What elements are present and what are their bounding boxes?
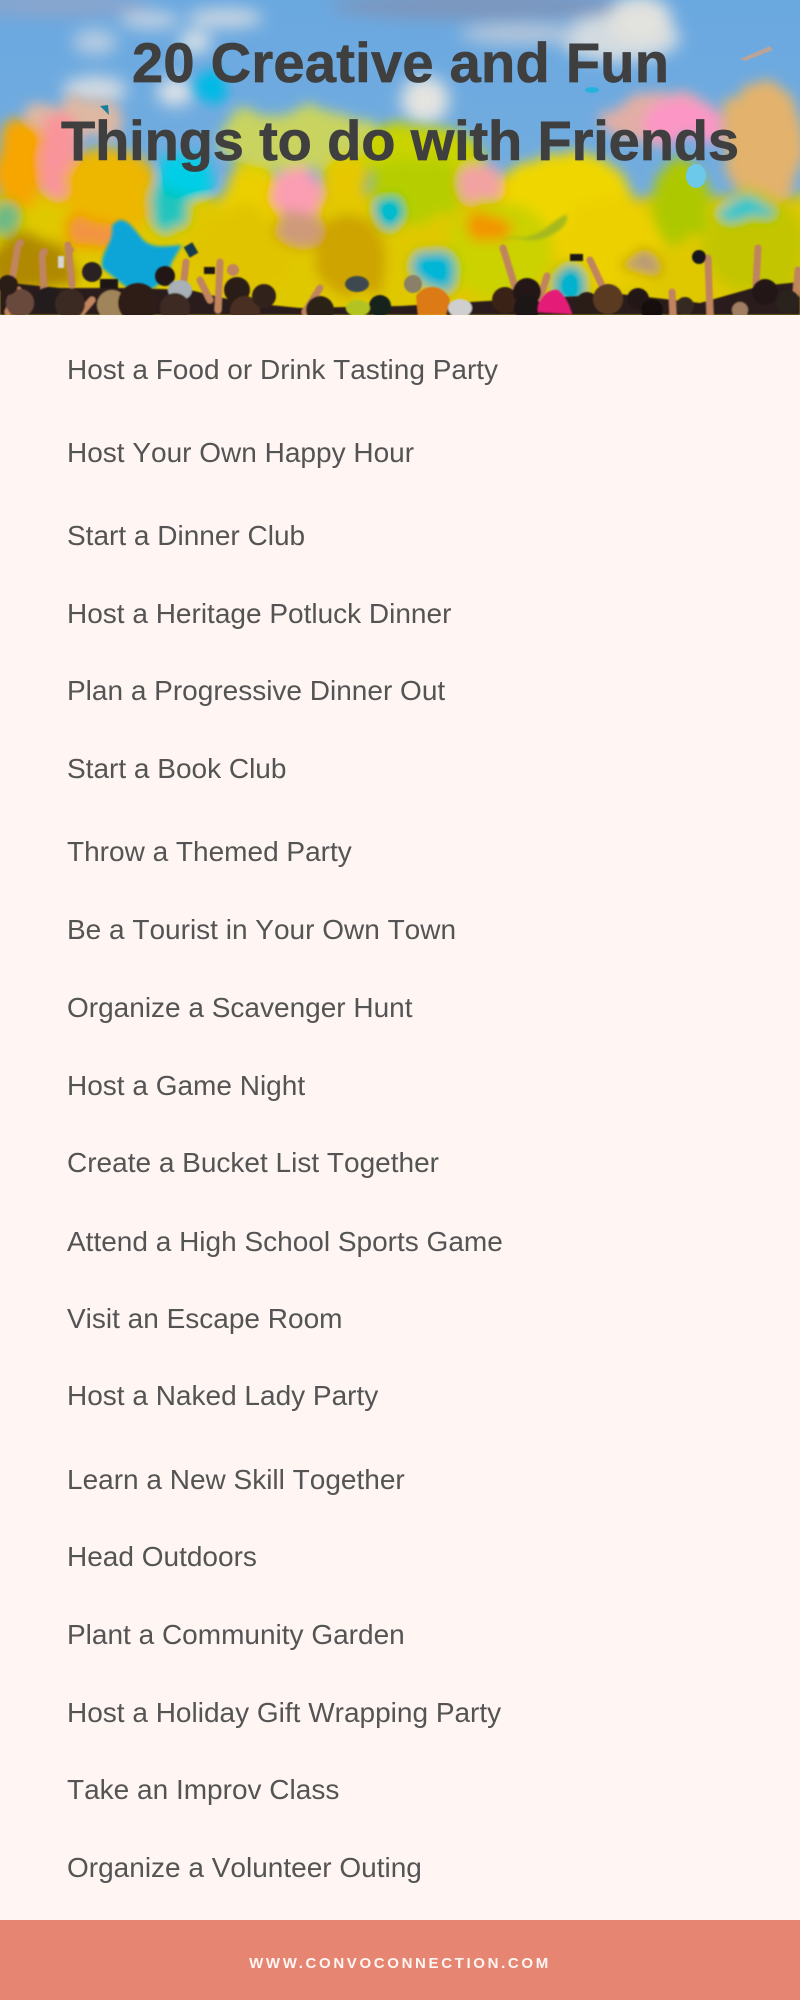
item 8: Be a Tourist in Your Own Town (67, 914, 456, 945)
blue powder plume (102, 220, 182, 291)
item 4: Host a Heritage Potluck Dinner (67, 598, 451, 629)
item 10: Host a Game Night (67, 1070, 305, 1101)
item 1: Host a Food or Drink Tasting Party (67, 354, 498, 385)
item 6: Start a Book Club (67, 753, 286, 784)
crowd (0, 239, 800, 326)
sky background (0, 0, 800, 315)
item 13: Visit an Escape Room (67, 1303, 342, 1334)
item 11: Create a Bucket List Together (67, 1147, 439, 1178)
item 16: Head Outdoors (67, 1541, 257, 1572)
item 17: Plant a Community Garden (67, 1619, 405, 1650)
hands and phones (16, 239, 706, 288)
small floating details (100, 46, 773, 188)
item 12: Attend a High School Sports Game (67, 1226, 503, 1257)
item 7: Throw a Themed Party (67, 836, 352, 867)
item 20: Organize a Volunteer Outing (67, 1852, 422, 1883)
item 14: Host a Naked Lady Party (67, 1380, 378, 1411)
title (61, 31, 739, 172)
website url: WWW.CONVOCONNECTION.COM (249, 1955, 551, 1972)
item 5: Plan a Progressive Dinner Out (67, 675, 445, 706)
footer bar with website (0, 1920, 800, 2000)
raised arms (8, 245, 798, 314)
item 9: Organize a Scavenger Hunt (67, 992, 413, 1023)
title line 2: Things to do with Friends (61, 109, 739, 172)
item 2: Host Your Own Happy Hour (67, 437, 414, 468)
item 18: Host a Holiday Gift Wrapping Party (67, 1697, 501, 1728)
hero banner: colored powder festival photo with title (0, 0, 800, 315)
title line 1: 20 Creative and Fun (132, 31, 669, 94)
item 15: Learn a New Skill Together (67, 1464, 405, 1495)
green powder scarf (500, 214, 567, 243)
colored powder clouds (0, 67, 800, 325)
clouds (0, 0, 680, 124)
item 3: Start a Dinner Club (67, 520, 305, 551)
item 19: Take an Improv Class (67, 1774, 339, 1805)
heads (0, 262, 800, 326)
